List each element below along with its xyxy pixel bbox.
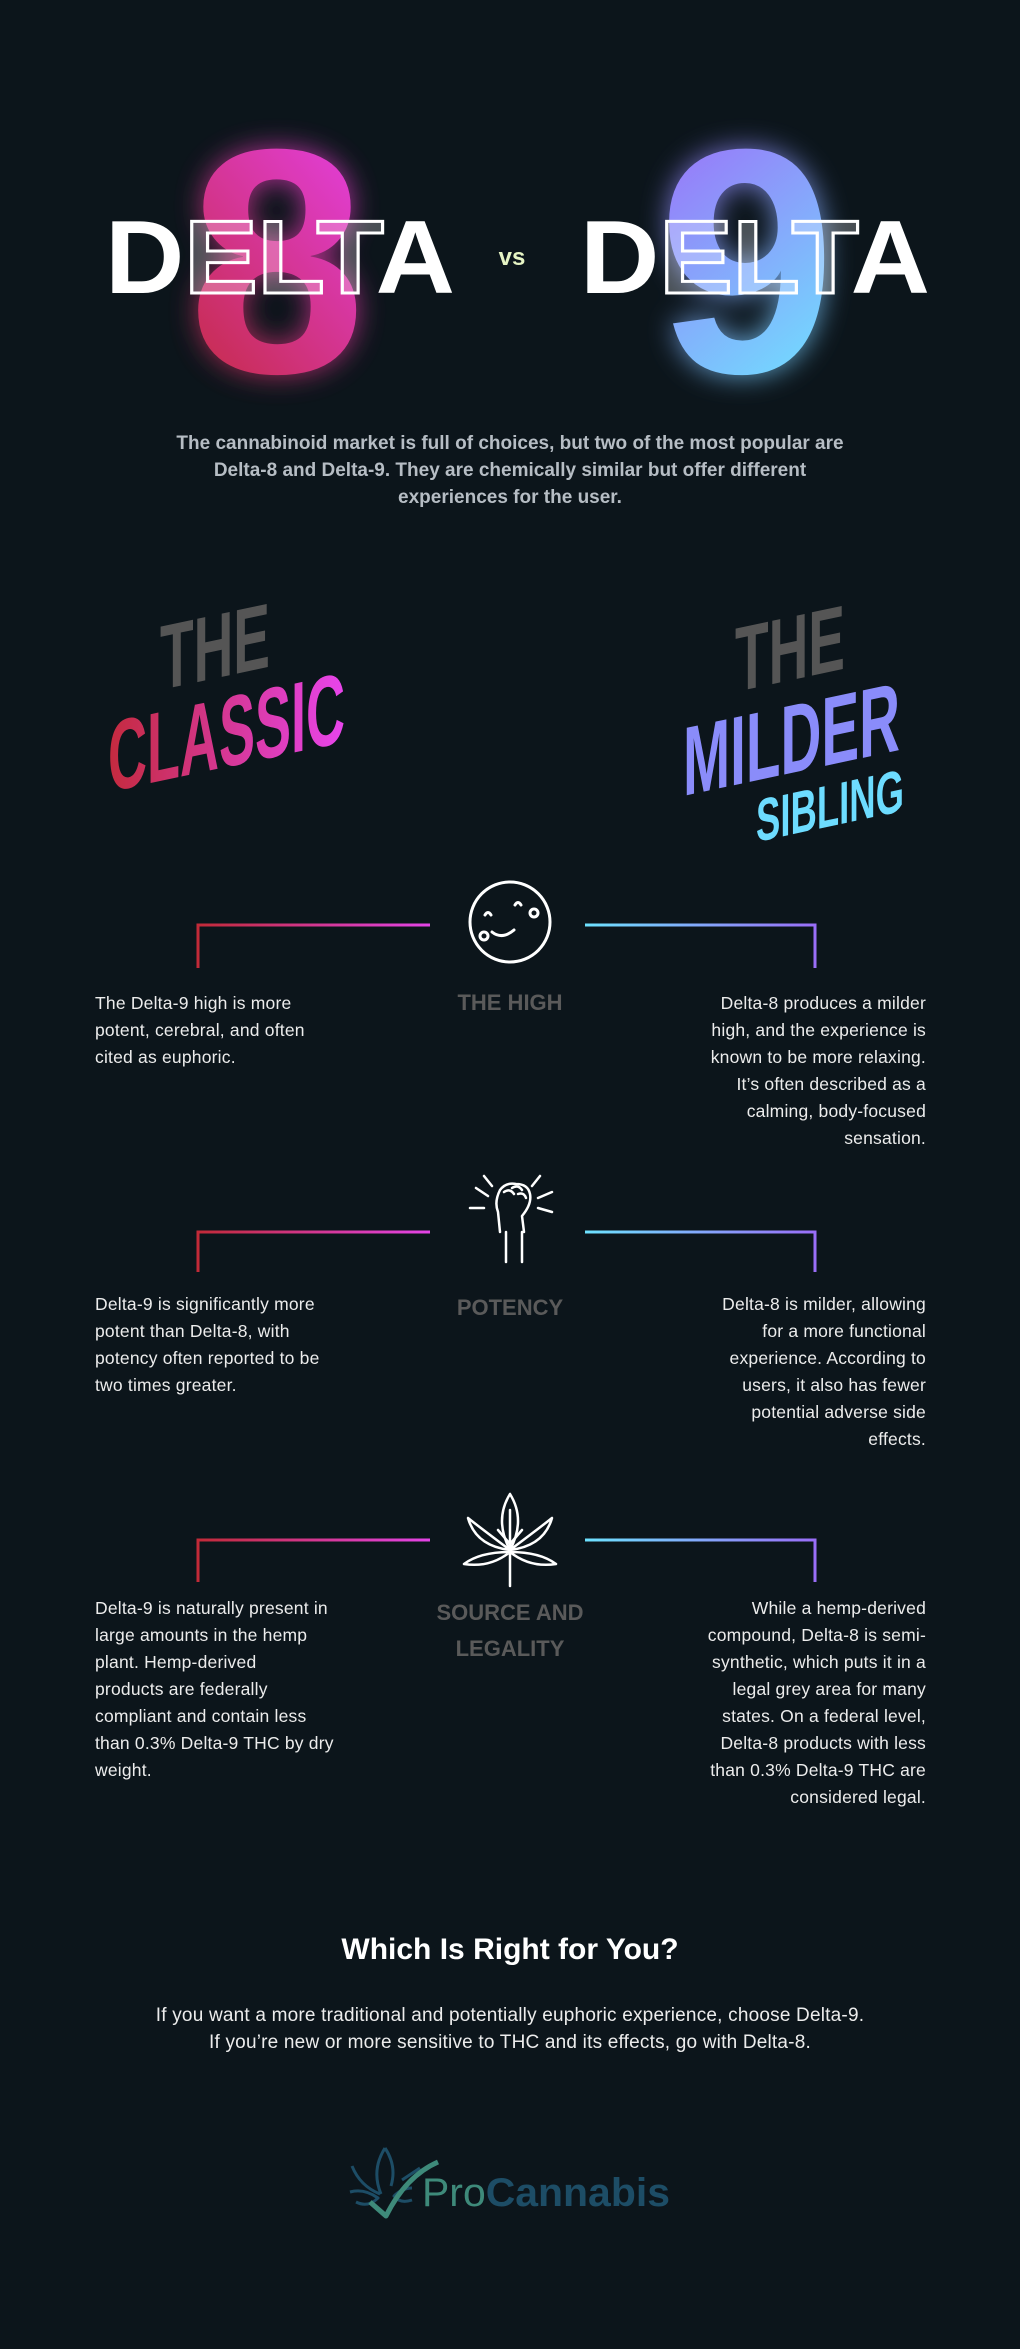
text: potency right: for a more functional <box>762 1321 926 1341</box>
intro text: Delta-8 and Delta-9. They are chemically similar but offer different <box>214 460 806 481</box>
text: source left: products are federally <box>95 1679 268 1699</box>
text: potency left: Delta-9 is significantly more <box>95 1294 315 1314</box>
text: source right: states. On a federal level, <box>722 1706 926 1726</box>
connectors and icons <box>196 880 816 1588</box>
logo: ProCannabis <box>350 2147 670 2218</box>
label: source and legality: SOURCE AND <box>436 1600 584 1625</box>
big number 9: 9 <box>658 82 836 440</box>
text: high left: potent, cerebral, and often <box>95 1020 305 1040</box>
label: potency: POTENCY <box>457 1295 563 1320</box>
text: source right: legal grey area for many <box>732 1679 926 1699</box>
text: potency right: effects. <box>868 1429 926 1449</box>
text: source right: While a hemp-derived <box>752 1598 926 1618</box>
intro text: experiences for the user. <box>398 487 622 508</box>
text: potency right: Delta-8 is milder, allowing <box>722 1294 926 1314</box>
text: source left: plant. Hemp-derived <box>95 1652 256 1672</box>
connector: potency left <box>198 1232 430 1272</box>
text: high left <box>95 993 305 1067</box>
text: high left: cited as euphoric. <box>95 1047 236 1067</box>
icon: smiley <box>470 882 550 962</box>
text: potency left <box>95 1294 320 1395</box>
text: potency right: experience. According to <box>730 1348 926 1368</box>
text: high right: Delta-8 produces a milder <box>721 993 926 1013</box>
tagline: the classic <box>108 584 345 814</box>
vs: vs <box>499 244 525 271</box>
text: source left: weight. <box>95 1760 152 1780</box>
label: source and legality: LEGALITY <box>456 1636 564 1661</box>
text: source right: Delta-8 products with less <box>720 1733 926 1753</box>
tagline: the milder sibling: SIBLING <box>756 756 904 855</box>
header: Delta 8 vs Delta 9 <box>105 82 930 440</box>
big number 9: 9 <box>658 82 836 440</box>
icon: fist <box>470 1176 552 1262</box>
text: source left: Delta-9 is naturally present in <box>95 1598 328 1618</box>
label: the high: THE HIGH <box>457 990 563 1015</box>
big number 8: 8 <box>188 82 366 440</box>
taglines <box>108 584 904 855</box>
text: potency left: potent than Delta-8, with <box>95 1321 290 1341</box>
tagline: the classic: THE <box>160 584 270 710</box>
text: source right <box>708 1598 926 1807</box>
intro text <box>176 433 844 508</box>
text: high left: The Delta-9 high is more <box>95 993 291 1013</box>
text: high right: known to be more relaxing. <box>711 1047 926 1067</box>
text: source left: compliant and contain less <box>95 1706 306 1726</box>
text: source right: than 0.3% Delta-9 THC are <box>710 1760 926 1780</box>
text: potency left: potency often reported to be <box>95 1348 320 1368</box>
title right DELTA: DELTA <box>580 200 930 316</box>
text: high right: It’s often described as a <box>736 1074 926 1094</box>
title left DELTA: DELTA <box>105 200 455 316</box>
text: source right: compound, Delta-8 is semi- <box>708 1625 926 1645</box>
text: potency right <box>722 1294 926 1449</box>
label: source and legality <box>436 1600 584 1661</box>
big number 8: 8 <box>188 82 366 440</box>
tagline: the milder sibling <box>683 586 904 855</box>
logo leaf icon <box>350 2148 438 2216</box>
tagline: the classic: CLASSIC <box>108 652 345 814</box>
intro text: The cannabinoid market is full of choices, but two of the most popular are <box>176 433 844 454</box>
connector: high left <box>198 925 430 968</box>
text: high right: sensation. <box>844 1128 926 1148</box>
text: high right: calming, body-focused <box>747 1101 926 1121</box>
text: conclusion <box>156 2005 864 2053</box>
connector: potency right <box>585 1232 815 1272</box>
text: source right: synthetic, which puts it in a <box>712 1652 926 1672</box>
text: conclusion: If you want a more traditional and potentially euphoric experience, choose Delta-9. <box>156 2005 864 2026</box>
text: source left: than 0.3% Delta-9 THC by dry <box>95 1733 334 1753</box>
heading: which is right: Which Is Right for You? <box>341 1933 679 1966</box>
text: potency right: users, it also has fewer <box>742 1375 926 1395</box>
tagline: the milder sibling: THE <box>735 586 845 712</box>
text: source right: considered legal. <box>790 1787 926 1807</box>
connector: source left <box>198 1540 430 1582</box>
icon: cannabis leaf <box>464 1494 556 1586</box>
connector: high right <box>585 925 815 968</box>
text: high right: high, and the experience is <box>711 1020 926 1040</box>
text: conclusion: If you’re new or more sensitive to THC and its effects, go with Delta-8. <box>209 2032 811 2053</box>
text: potency left: two times greater. <box>95 1375 237 1395</box>
text: potency right: potential adverse side <box>751 1402 926 1422</box>
connector: source right <box>585 1540 815 1582</box>
text: source left: large amounts in the hemp <box>95 1625 307 1645</box>
logo text: ProCannabis <box>422 2171 670 2215</box>
text: source left <box>95 1598 334 1780</box>
text: high right <box>711 993 926 1148</box>
